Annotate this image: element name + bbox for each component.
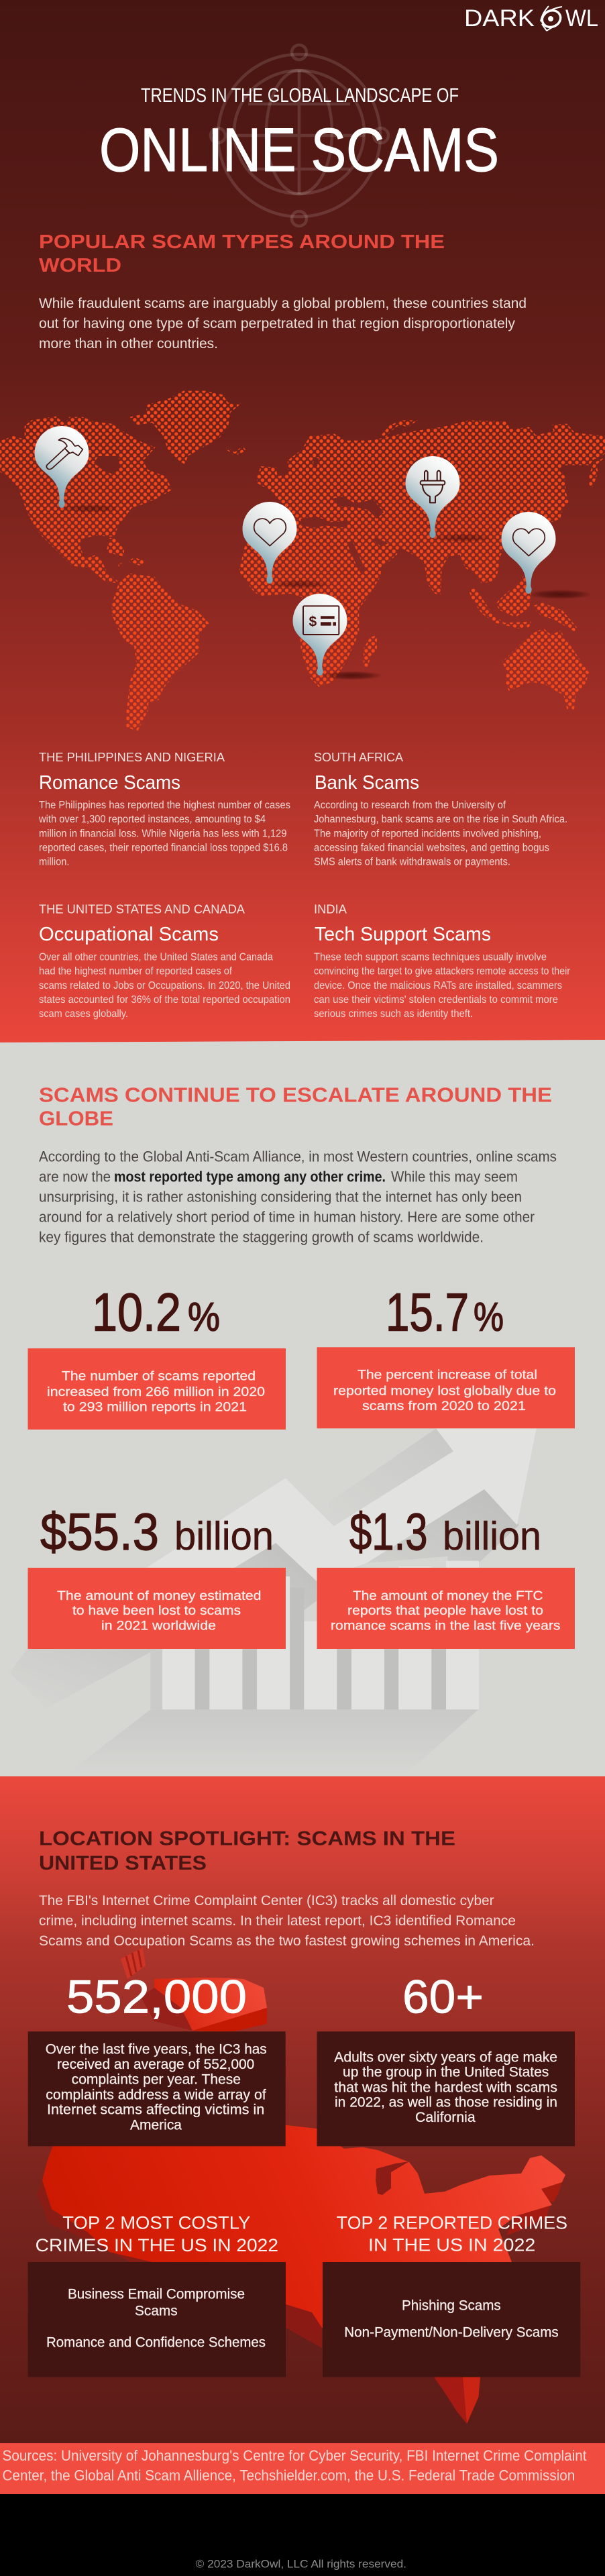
heading: location spotlight: UNITED STATES [39,1852,207,1874]
text block: intro [39,296,527,352]
panel: romance scams: reported cases, their reported financial loss topped $16.8 [39,842,288,853]
panel: occupational scams: THE UNITED STATES AND CANADA [39,902,245,916]
callout: most costly list [28,2262,286,2377]
callout: IC3 complaints: complaints per year. These [72,2072,241,2088]
panel: tech support scams: Tech Support Scams [315,924,491,945]
heading: top 2 reported crimes: TOP 2 REPORTED CRIMES [337,2212,567,2233]
logo: DarkOwl: WL [565,5,598,32]
heading: popular scam types [39,231,445,276]
panel: bank scams: Johannesburg, bank scams are on the rise in South Africa. [314,814,567,825]
panel: tech support scams: can use their victims' stolen credentials to commit more [314,994,558,1006]
logo: DarkOwl [464,5,598,32]
text block: escalation intro: While this may seem [391,1169,518,1185]
panel: footer [0,2494,605,2576]
map pin: bank check, South Africa [292,594,383,680]
panel: bank scams: Bank Scams [315,772,419,794]
panel: bank scams: accessing faked financial websites, and getting bogus [314,842,549,853]
heading: popular scam types: POPULAR SCAM TYPES AROUND THE [39,231,445,253]
callout: money lost worldwide: to have been lost to scams [72,1603,241,1618]
callout: IC3 complaints: Over the last five years, the IC3 has [46,2042,267,2057]
stat: 10.2%: 10.2 [92,1282,181,1342]
heading: top 2 reported crimes: IN THE US IN 2022 [368,2235,535,2255]
text block: location intro: Scams and Occupation Scams as the two fastest growing schemes in America. [39,1933,535,1949]
logo: DarkOwl: DARK [464,5,535,32]
text block: escalation intro: are now the [39,1169,111,1185]
callout: percent increase: reported money lost globally due to [333,1384,556,1399]
panel: sources: Center, the Global Anti Scam Allience, Techshielder.com, the U.S. Federal Trade Commission [3,2467,575,2483]
callout: money lost worldwide: The amount of money estimated [57,1589,262,1603]
title: main: ONLINE SCAMS [99,116,499,184]
map pin: heart, Philippines [502,512,592,599]
panel: bank scams: According to research from the University of [314,800,506,811]
text block: location intro: The FBI's Internet Crime Complaint Center (IC3) tracks all domestic cyber [39,1893,494,1909]
stat: 15.7%: 15.7 [386,1282,469,1342]
panel: bank scams: The majority of reported incidents involved phishing, [314,828,541,839]
text block: escalation intro: most reported type among any other crime. [114,1169,386,1185]
callout: IC3 complaints [28,2031,286,2146]
stat: 15.7%: % [474,1294,504,1339]
heading: top 2 most costly crimes: CRIMES IN THE US IN 2022 [36,2235,278,2255]
callout: romance scam losses: reports that people have lost to [347,1603,543,1618]
panel: location spotlight background [0,1776,605,2443]
callout: percent increase [317,1347,575,1428]
chart: rising arrow and bars watermark [9,1428,537,1776]
panel: occupational scams: Occupational Scams [39,924,219,945]
heading: popular scam types: WORLD [39,255,121,276]
callout: adults over sixty [317,2031,575,2146]
stat: 60+: 60+ [402,1971,484,2023]
heading: top 2 most costly crimes [36,2212,278,2255]
panel: sources: Sources: University of Johannesburg's Centre for Cyber Security, FBI Internet Crime Complaint [3,2447,586,2464]
callout: percent increase: scams from 2020 to 2021 [362,1399,526,1413]
map pin: plug, India [405,456,494,542]
callout: IC3 complaints: complaints address a wide array of [46,2087,266,2102]
callout: IC3 complaints: America [130,2117,182,2133]
panel: tech support scams: INDIA [314,902,347,916]
heading: scams continue to escalate: GLOBE [39,1107,113,1130]
callout: most costly list: Business Email Compromise [68,2286,245,2302]
callout: romance scam losses: romance scams in the last five years [331,1618,561,1633]
callout: IC3 complaints: Internet scams affecting victims in [47,2102,264,2118]
text block: location intro: crime, including internet scams. In their latest report, IC3 identified Romance [39,1913,516,1929]
callout: most reported list: Phishing Scams [402,2298,501,2313]
text block: location intro [39,1893,535,1949]
callout: scams reported [28,1348,286,1430]
map pin: bank check, South Africa: $ [309,614,317,629]
chart: dotted world map [0,382,605,735]
panel: romance scams: million. [39,856,70,867]
panel: romance scams: THE PHILIPPINES AND NIGERIA [39,750,225,764]
callout: most reported list [323,2262,580,2377]
callout: adults over sixty: that was hit the hardest with scams [334,2080,557,2095]
callout: romance scam losses [317,1568,575,1649]
panel: romance scams: Romance Scams [39,772,180,794]
callout: most costly list: Scams [135,2304,178,2319]
map pin: hammer, United States and Canada [34,426,121,513]
stat: $1.3 billion: $1.3 [349,1502,428,1561]
panel: header [99,5,598,226]
text block: escalation intro: key figures that demonstrate the staggering growth of scams worldwide. [39,1229,484,1246]
callout: IC3 complaints: received an average of 552,000 [57,2057,254,2072]
panel: occupational scams [39,902,290,1020]
callout: most costly list: Romance and Confidence Schemes [46,2334,266,2350]
icon: globe watermark [211,45,388,226]
text block: escalation intro: According to the Global Anti-Scam Alliance, in most Western countries, online scams [39,1148,557,1165]
stat: $1.3 billion [349,1502,541,1561]
callout: scams reported: increased from 266 million in 2020 [47,1385,265,1399]
panel: romance scams: million in financial loss. While Nigeria has less with 1,129 [39,828,287,839]
panel: tech support scams: device. Once the malicious RATs are installed, scammers [314,980,562,991]
panel: bank scams: SOUTH AFRICA [314,750,404,764]
stat: $55.3 billion [40,1502,274,1561]
panel: tech support scams [314,902,570,1020]
callout: adults over sixty: up the group in the United States [343,2065,549,2080]
panel: grey escalation section background [0,1040,605,1776]
panel: tech support scams: convincing the target to give attackers remote access to their [314,966,570,977]
stat: $55.3 billion: billion [174,1514,274,1558]
panel: bank scams: SMS alerts of bank withdrawals or payments. [314,856,510,867]
panel: romance scams: with over 1,300 reported instances, amounting to $4 [38,814,266,825]
panel: occupational scams: Over all other countries, the United States and Canada [39,952,273,963]
stat: 552,000: 552,000 [66,1971,247,2023]
heading: scams continue to escalate [39,1083,552,1130]
text block: escalation intro: unsurprising, it is rather astonishing considering that the internet has only been [39,1189,522,1205]
callout: scams reported: to 293 million reports in 2021 [63,1399,247,1414]
panel: occupational scams: scams related to Jobs or Occupations. In 2020, the United [39,980,290,991]
heading: location spotlight [39,1828,455,1874]
callout: adults over sixty: in 2022, as well as those residing in [335,2095,557,2110]
callout: money lost worldwide: in 2021 worldwide [101,1618,216,1633]
callout: adults over sixty: California [415,2110,476,2125]
stat: $1.3 billion: billion [443,1514,541,1558]
panel: occupational scams: scam cases globally. [39,1008,128,1020]
callout: most reported list: Non-Payment/Non-Delivery Scams [344,2324,559,2340]
panel: romance scams [38,750,290,867]
callout: romance scam losses: The amount of money the FTC [353,1589,543,1603]
text block: escalation intro [39,1148,557,1246]
map pin: heart, Nigeria [243,502,331,589]
heading: top 2 most costly crimes: TOP 2 MOST COSTLY [62,2212,251,2233]
text block: intro: more than in other countries. [39,336,218,352]
heading: location spotlight: LOCATION SPOTLIGHT: SCAMS IN THE [39,1828,455,1850]
stat: 10.2%: % [188,1294,220,1339]
panel: sources [0,2443,605,2494]
panel: bank scams [314,750,567,867]
panel: footer: © 2023 DarkOwl, LLC All rights reserved. [196,2557,406,2570]
panel: romance scams: The Philippines has reported the highest number of cases [39,800,290,811]
text block: intro: out for having one type of scam perpetrated in that region disproportionately [39,316,515,331]
panel: background top gradient section [0,0,605,1046]
panel: occupational scams: states accounted for 36% of the total reported occupation [39,994,290,1006]
callout: money lost worldwide [28,1568,286,1649]
chart: 3D map of the United States [37,1947,565,2424]
callout: percent increase: The percent increase of total [358,1367,537,1382]
callout: scams reported: The number of scams reported [62,1369,256,1384]
panel: tech support scams: These tech support scams techniques usually involve [314,952,547,963]
stat: $55.3 billion: $55.3 [40,1502,159,1561]
heading: scams continue to escalate: SCAMS CONTINUE TO ESCALATE AROUND THE [39,1083,552,1107]
text block: escalation intro: around for a relatively short period of time in human history. Here are some other [39,1209,535,1226]
callout: adults over sixty: Adults over sixty years of age make [334,2049,557,2065]
heading: top 2 reported crimes [337,2212,567,2255]
panel: tech support scams: serious crimes such as identity theft. [314,1008,473,1020]
panel: occupational scams: had the highest number of reported cases of [39,966,233,977]
title: kicker: TRENDS IN THE GLOBAL LANDSCAPE OF [141,85,459,107]
text block: intro: While fraudulent scams are inarguably a global problem, these countries stand [39,296,527,311]
